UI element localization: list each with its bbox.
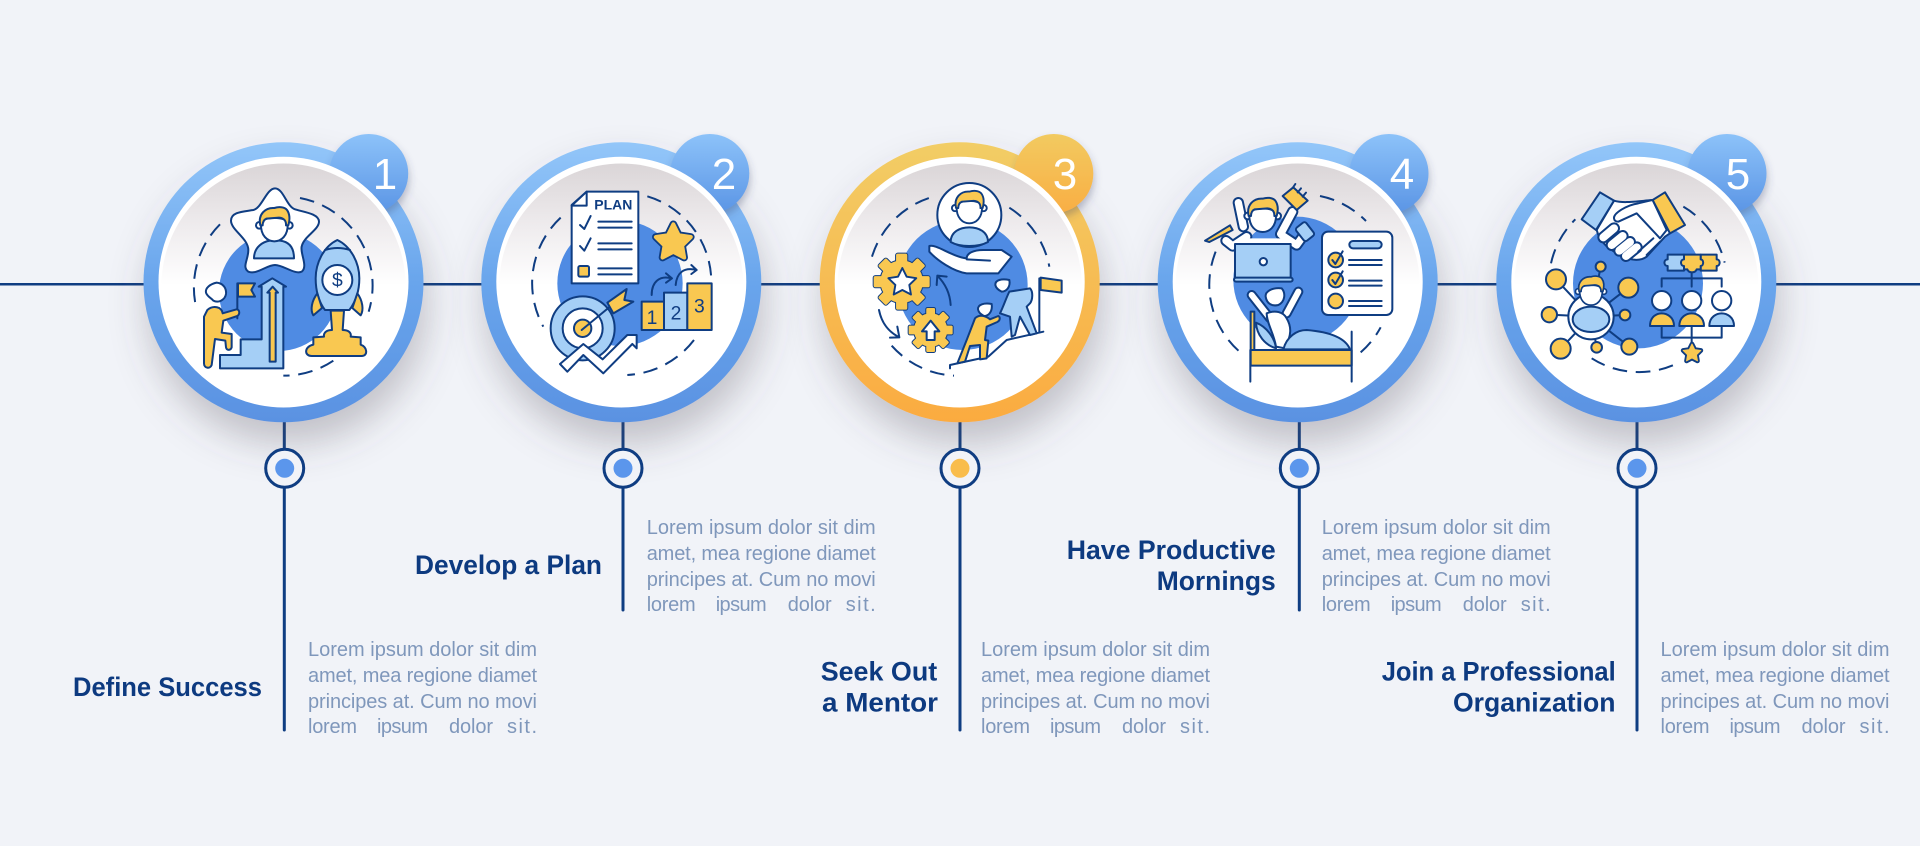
body text 4: ipsum	[1391, 594, 1442, 616]
body text 2: principes at. Cum no movi	[647, 569, 876, 591]
ring 5 with number badge: 5	[1726, 150, 1750, 199]
node 5	[1618, 449, 1656, 487]
body text 4: amet, mea regione diamet	[1322, 543, 1551, 565]
connector stem 4	[1298, 410, 1301, 610]
heading 3: a Mentor	[822, 688, 939, 718]
body text 4: sit.	[1521, 594, 1551, 616]
body text 4: Lorem ipsum dolor sit dim	[1322, 517, 1551, 539]
ring 1 with number badge: 1	[373, 150, 397, 199]
panel: step 5 join a professional organization	[1382, 134, 1890, 738]
panel: step 4 have productive mornings	[1067, 134, 1551, 616]
heading 4: Have Productive	[1067, 535, 1276, 565]
body text 2: Lorem ipsum dolor sit dim	[647, 517, 876, 539]
ring 3 with number badge: 3	[1053, 150, 1077, 199]
ring 5 with number badge	[1496, 134, 1776, 422]
node 4	[1280, 449, 1318, 487]
body text 2: dolor	[788, 594, 832, 616]
body text 1: Lorem ipsum dolor sit dim	[308, 639, 537, 661]
body text 1: lorem	[308, 716, 357, 738]
body text 3: sit.	[1180, 716, 1210, 738]
icon: mentor, gears and climbers	[872, 183, 1062, 376]
body text 1: amet, mea regione diamet	[308, 665, 537, 687]
heading 4: Mornings	[1157, 566, 1276, 596]
heading 3: Seek Out	[821, 657, 937, 687]
body text 1: principes at. Cum no movi	[308, 691, 537, 713]
body text 3: principes at. Cum no movi	[981, 691, 1210, 713]
icon: plan, target and podium: 1	[647, 308, 657, 329]
panel: step 1 define success	[73, 134, 537, 738]
body text 2: lorem	[647, 594, 696, 616]
icon: plan, target and podium: PLAN	[594, 196, 632, 212]
icon: plan, target and podium: 3	[694, 297, 705, 318]
heading 5: Organization	[1453, 688, 1616, 718]
body text 4: dolor	[1463, 594, 1507, 616]
body text 3: lorem	[981, 716, 1030, 738]
connector stem 3	[958, 410, 962, 730]
body text 5: Lorem ipsum dolor sit dim	[1660, 639, 1890, 661]
ring 2 with number badge	[481, 134, 761, 422]
ring 1 with number badge	[144, 134, 424, 422]
body text 3: Lorem ipsum dolor sit dim	[981, 639, 1210, 661]
node 1	[266, 449, 304, 487]
heading 5: Join a Professional	[1382, 657, 1616, 687]
body text 3: dolor	[1122, 716, 1166, 738]
connector stem 2	[622, 410, 624, 610]
node 2	[604, 449, 642, 487]
body text 3: amet, mea regione diamet	[981, 665, 1210, 687]
body text 2: sit.	[846, 594, 876, 616]
body text 5: dolor	[1802, 716, 1846, 738]
body text 1: sit.	[507, 716, 537, 738]
heading 1: Define Success	[73, 672, 262, 702]
icon: climbing stairs and rocket	[194, 188, 373, 376]
body text 1: ipsum	[377, 716, 428, 738]
connector stem 1	[283, 410, 286, 730]
ring 3 with number badge	[820, 134, 1100, 422]
body text 2: ipsum	[716, 594, 767, 616]
body text 4: lorem	[1322, 594, 1371, 616]
body text 5: principes at. Cum no movi	[1660, 691, 1890, 713]
body text 5: sit.	[1860, 716, 1890, 738]
icon: climbing stairs and rocket: $	[332, 271, 343, 292]
ring 4 with number badge: 4	[1390, 150, 1414, 199]
body text 5: amet, mea regione diamet	[1660, 665, 1890, 687]
heading 2: Develop a Plan	[415, 550, 602, 580]
icon: plan, target and podium: 2	[671, 303, 681, 324]
body text 5: lorem	[1660, 716, 1710, 738]
body text 5: ipsum	[1730, 716, 1780, 738]
horizontal timeline	[0, 283, 1920, 286]
ring 4 with number badge	[1158, 134, 1438, 422]
panel: step 2 develop a plan	[415, 134, 876, 616]
panel: step 3 seek out a mentor	[820, 134, 1210, 738]
icon: multitasking, checklist and bed	[1205, 184, 1392, 382]
connector stem 5	[1636, 410, 1638, 730]
body text 1: dolor	[449, 716, 493, 738]
node 3	[941, 449, 979, 487]
body text 2: amet, mea regione diamet	[647, 543, 876, 565]
body text 3: ipsum	[1050, 716, 1101, 738]
icon: plan, target and podium	[532, 192, 712, 375]
body text 4: principes at. Cum no movi	[1322, 569, 1551, 591]
icon: handshake, network and team	[1542, 192, 1734, 372]
ring 2 with number badge: 2	[712, 150, 736, 199]
